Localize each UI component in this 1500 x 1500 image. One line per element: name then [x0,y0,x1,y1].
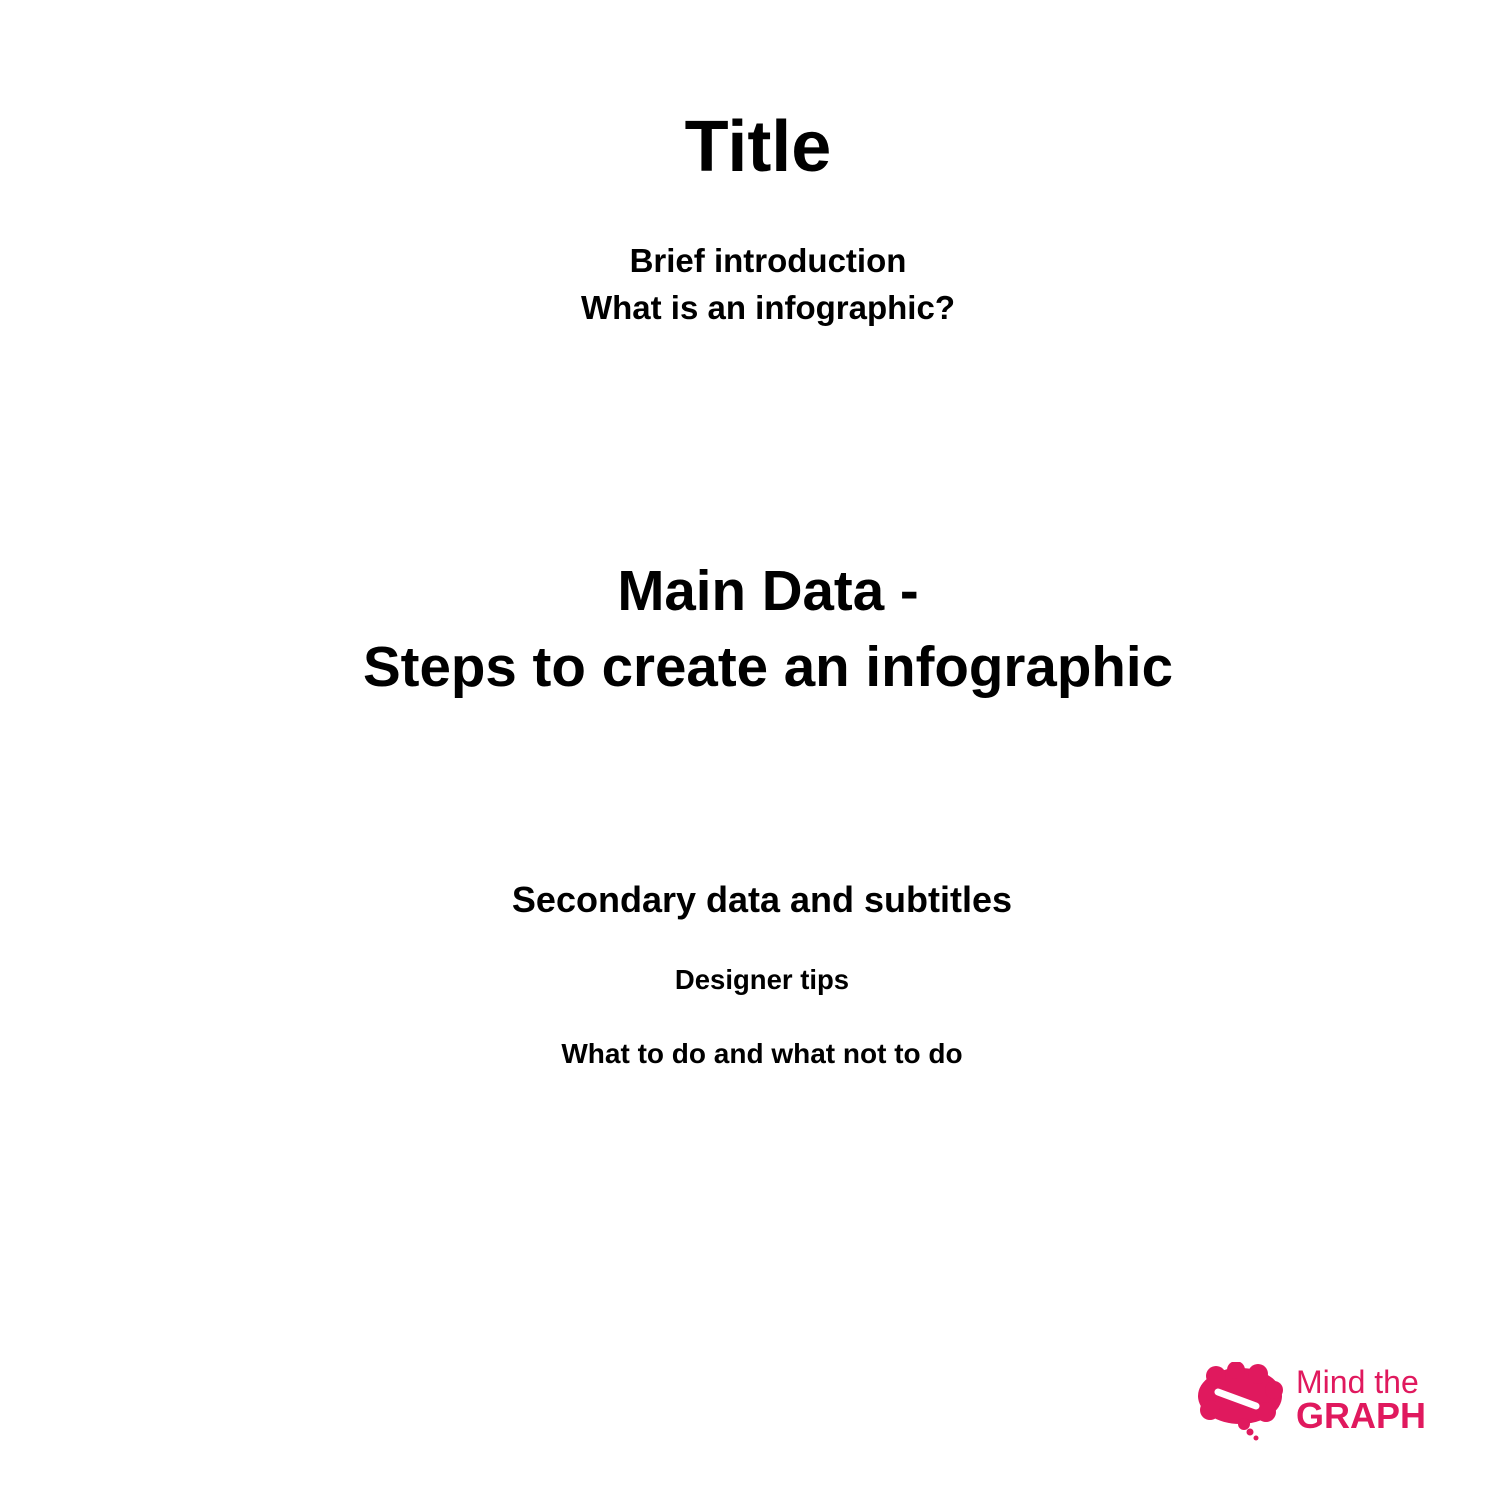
secondary heading: Secondary data and subtitles [512,879,1012,920]
logo text [1296,1364,1426,1436]
icon: brain [1198,1362,1283,1440]
do and don't: What to do and what not to do [561,1038,963,1069]
designer tips: Designer tips [675,964,849,995]
main data heading: Steps to create an infographic [363,635,1173,698]
intro text: Brief introduction [630,242,906,279]
logo text: Mind the [1296,1364,1419,1400]
logo [1198,1362,1426,1440]
title: Title [685,107,831,187]
intro text: What is an infographic? [581,289,955,326]
main data heading [363,559,1173,698]
intro text [581,242,955,326]
logo text: GRAPH [1296,1395,1426,1436]
main data heading: Main Data - [617,559,919,622]
